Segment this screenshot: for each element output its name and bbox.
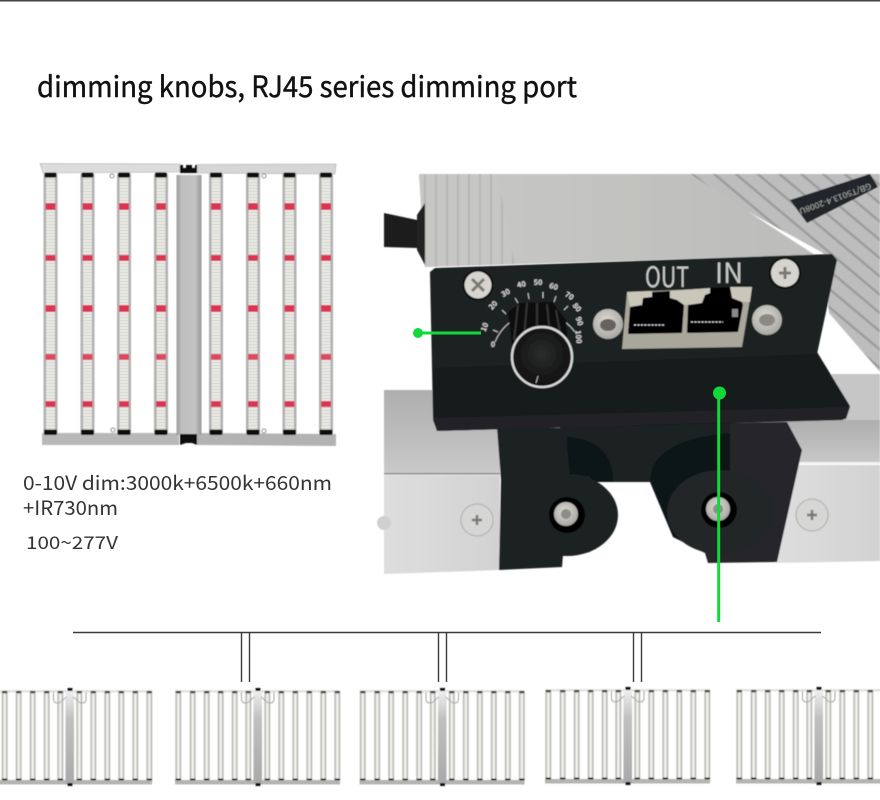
- linked light 5: [736, 687, 880, 785]
- photo: dimmer scale: 90: [573, 315, 586, 328]
- photo: left rail: [384, 390, 500, 574]
- product image: LED grow light with eight bars: [40, 164, 336, 446]
- photo: bracket backing: [560, 420, 735, 482]
- callout: green pointer to knob: [413, 328, 481, 338]
- top border line: [0, 0, 880, 2]
- callout: green pointer to linked lights: [713, 386, 726, 622]
- photo: dimmer scale: 60: [548, 280, 560, 293]
- photo: power cable: [384, 203, 425, 265]
- linked light 4: [545, 687, 710, 785]
- product photo: driver box with dimming knob and RJ45 ports: [377, 174, 880, 574]
- photo: right hinge bracket: [650, 422, 802, 563]
- photo: dimmer scale: 30: [499, 286, 513, 300]
- photo: shelf plate: [432, 352, 850, 431]
- photo: front plate: [430, 254, 837, 368]
- photo: housing top: [419, 174, 815, 267]
- photo: right rail: [775, 374, 880, 563]
- photo: dimmer scale: 100: [572, 330, 585, 344]
- linked light 1: [0, 688, 152, 786]
- spec line: IR: +IR730nm: [23, 492, 118, 521]
- photo: dimmer scale: 40: [516, 278, 528, 291]
- photo: heat-shrink label: GB/T5013.4-2008U: [798, 180, 873, 217]
- photo: dimmer scale: [478, 277, 586, 350]
- photo: left hinge bracket: [497, 428, 618, 570]
- photo: port labels: [645, 252, 743, 296]
- photo: dimmer scale: 70: [563, 289, 576, 303]
- linked light 3: [360, 688, 525, 786]
- linked light 2: [175, 688, 340, 786]
- light: central driver channel: [110, 165, 266, 445]
- title: dimming knobs, RJ45 series dimming port: [37, 64, 577, 106]
- photo: port labels: OUT: [645, 256, 689, 296]
- photo: plate screws: [462, 257, 801, 339]
- light: LED bars: [44, 172, 333, 435]
- photo: dimming knob: [508, 302, 572, 387]
- photo: heat-shrink label: [790, 174, 878, 223]
- connection wiring between lights: [73, 632, 821, 682]
- photo: dimmer scale: 0: [491, 339, 496, 350]
- specification text: [23, 467, 332, 555]
- photo: port labels: IN: [715, 252, 743, 292]
- photo: dimmer scale: 80: [570, 300, 584, 315]
- photo: dimmer scale: 20: [486, 298, 501, 312]
- photo: dimmer scale: 50: [534, 277, 543, 288]
- spec line: dimming spectrum: 0-10V dim:3000k+6500k+660nm: [23, 467, 332, 496]
- photo: right fins: [680, 174, 880, 372]
- photo: rail screws: [377, 499, 828, 536]
- photo: dimmer scale: 10: [478, 321, 492, 333]
- light: rear rails: [40, 164, 336, 446]
- photo: RJ45 ports: [622, 287, 752, 349]
- spec line: voltage: 100~277V: [26, 530, 119, 555]
